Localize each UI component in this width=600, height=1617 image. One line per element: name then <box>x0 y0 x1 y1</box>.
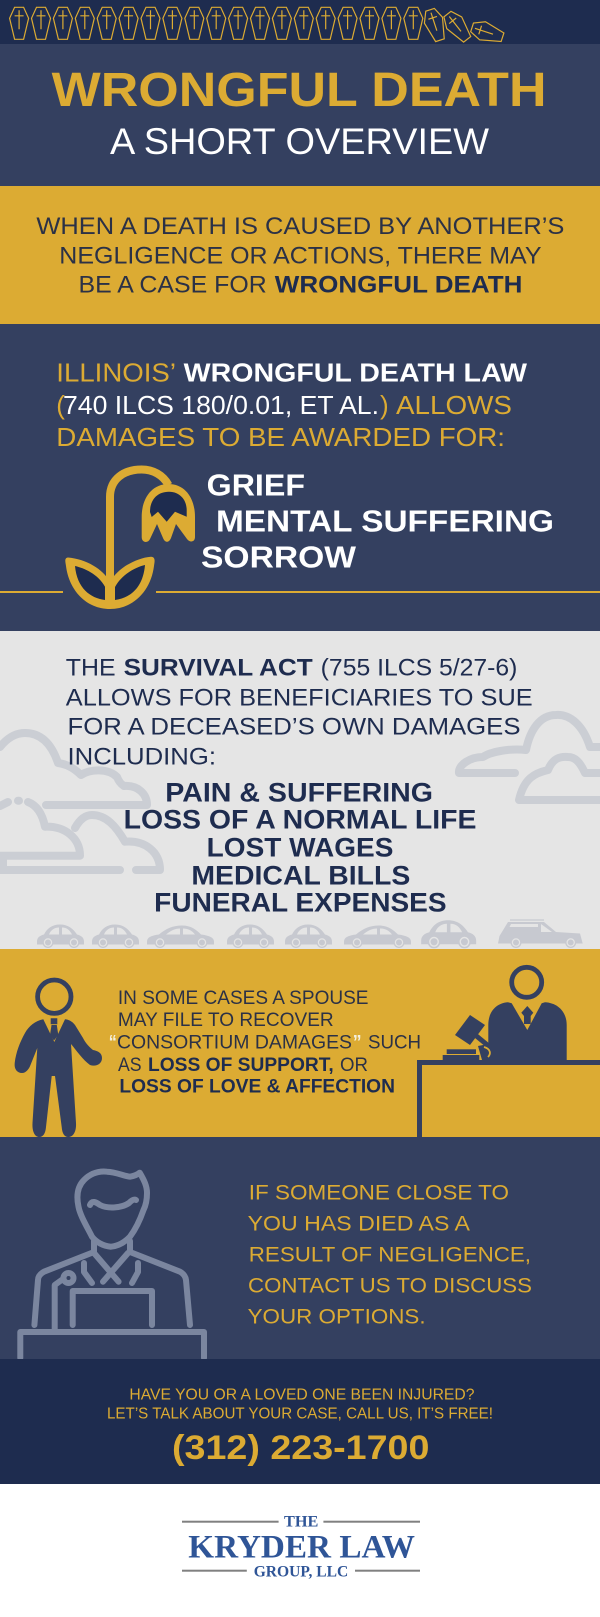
text block: consortium damages: SUCH <box>368 1033 421 1054</box>
panel: survival act <box>0 631 600 949</box>
icon: funeral procession cars <box>37 920 583 948</box>
logo: Kryder Law Group: KRYDER LAW <box>188 1529 415 1565</box>
text block: Illinois law: DAMAGES TO BE AWARDED FOR: <box>56 422 505 452</box>
text block: contact prompt: IF SOMEONE CLOSE TO <box>249 1180 509 1204</box>
text block: intro: NEGLIGENCE OR ACTIONS, THERE MAY <box>59 242 542 269</box>
icon: row of coffins <box>10 7 505 46</box>
title: WRONGFUL DEATH <box>52 64 546 117</box>
list: survival damages <box>124 777 476 918</box>
text block: contact prompt <box>248 1180 532 1329</box>
text block: contact prompt: CONTACT US TO DISCUSS <box>248 1274 532 1298</box>
list: survival damages: FUNERAL EXPENSES <box>154 888 447 918</box>
text block: consortium damages <box>109 988 421 1098</box>
logo: Kryder Law Group: GROUP, LLC <box>254 1564 348 1581</box>
list: awarded damages: GRIEF <box>207 467 305 502</box>
list: survival damages: MEDICAL BILLS <box>191 860 410 890</box>
text block: contact prompt: RESULT OF NEGLIGENCE, <box>249 1243 531 1267</box>
panel: wrongful death law <box>0 324 600 631</box>
panel: call to action <box>0 1359 600 1484</box>
panel: contact prompt <box>0 1137 600 1359</box>
text block: Illinois law: ALLOWS <box>396 390 512 420</box>
text block: consortium damages: CONSORTIUM DAMAGES <box>117 1033 352 1054</box>
text block: survival act: ALLOWS FOR BENEFICIARIES TO SUE <box>66 684 533 711</box>
panel: title <box>0 44 600 186</box>
text block: call to action: LET’S TALK ABOUT YOUR CASE, CALL US, IT’S FREE! <box>107 1405 493 1422</box>
text block: consortium damages: AS <box>118 1055 142 1076</box>
icon: speaker at podium <box>20 1172 204 1358</box>
list: awarded damages: SORROW <box>201 539 357 574</box>
text block: consortium damages: IN SOME CASES A SPOUSE <box>118 988 369 1009</box>
text block: contact prompt: YOUR OPTIONS. <box>248 1305 426 1329</box>
text block: consortium damages: “ <box>109 1033 117 1054</box>
text block: survival act: THE <box>66 654 116 681</box>
text block: survival act <box>66 654 533 770</box>
text block: survival act: FOR A DECEASED’S OWN DAMAGES <box>68 714 520 741</box>
text block: consortium damages: MAY FILE TO RECOVER <box>118 1010 334 1031</box>
text block: Illinois law: ILLINOIS’ <box>56 358 176 388</box>
list: survival damages: LOSS OF A NORMAL LIFE <box>124 805 476 835</box>
text block: Illinois law: ) <box>380 390 389 420</box>
text block: Illinois law: ( <box>56 390 65 420</box>
list: awarded damages: MENTAL SUFFERING <box>216 503 554 538</box>
phone number: (312) 223-1700 <box>172 1429 429 1467</box>
text block: survival act: (755 ILCS 5/27-6) <box>321 654 517 681</box>
text block: survival act: INCLUDING: <box>68 743 216 770</box>
icon: clouds <box>0 715 600 870</box>
text block: Illinois law: WRONGFUL DEATH LAW <box>184 358 527 388</box>
logo: Kryder Law Group: THE <box>284 1514 318 1531</box>
text block: contact prompt: YOU HAS DIED AS A <box>248 1212 471 1236</box>
text block: survival act: SURVIVAL ACT <box>124 654 313 681</box>
panel: footer logo <box>0 1484 600 1617</box>
list: awarded damages <box>201 467 554 574</box>
text block: consortium damages: ” <box>353 1033 362 1054</box>
text block: call to action: HAVE YOU OR A LOVED ONE BEEN INJURED? <box>129 1386 475 1403</box>
icon: standing man <box>15 980 102 1137</box>
text block: intro: BE A CASE FOR <box>78 271 267 298</box>
panel: coffin strip <box>0 0 600 46</box>
list: survival damages: PAIN & SUFFERING <box>165 777 433 807</box>
panel: intro statement <box>0 186 600 324</box>
text block: intro: WRONGFUL DEATH <box>275 271 522 298</box>
icon: judge at bench <box>417 967 600 1137</box>
logo: Kryder Law Group <box>188 1514 415 1581</box>
panel: consortium damages <box>0 949 600 1138</box>
text block: call to action <box>107 1386 493 1422</box>
list: survival damages: LOST WAGES <box>207 833 393 863</box>
subtitle: A SHORT OVERVIEW <box>110 121 489 162</box>
text block: intro <box>36 213 564 298</box>
text block: consortium damages: OR <box>340 1055 368 1076</box>
text block: intro: WHEN A DEATH IS CAUSED BY ANOTHER’S <box>36 213 564 240</box>
text block: Illinois law <box>56 358 527 452</box>
text block: consortium damages: LOSS OF SUPPORT, <box>148 1055 334 1076</box>
text block: Illinois law: 740 ILCS 180/0.01, ET AL. <box>63 390 379 420</box>
text block: consortium damages: LOSS OF LOVE & AFFECTION <box>119 1077 395 1098</box>
icon: wilted flower <box>65 470 195 609</box>
